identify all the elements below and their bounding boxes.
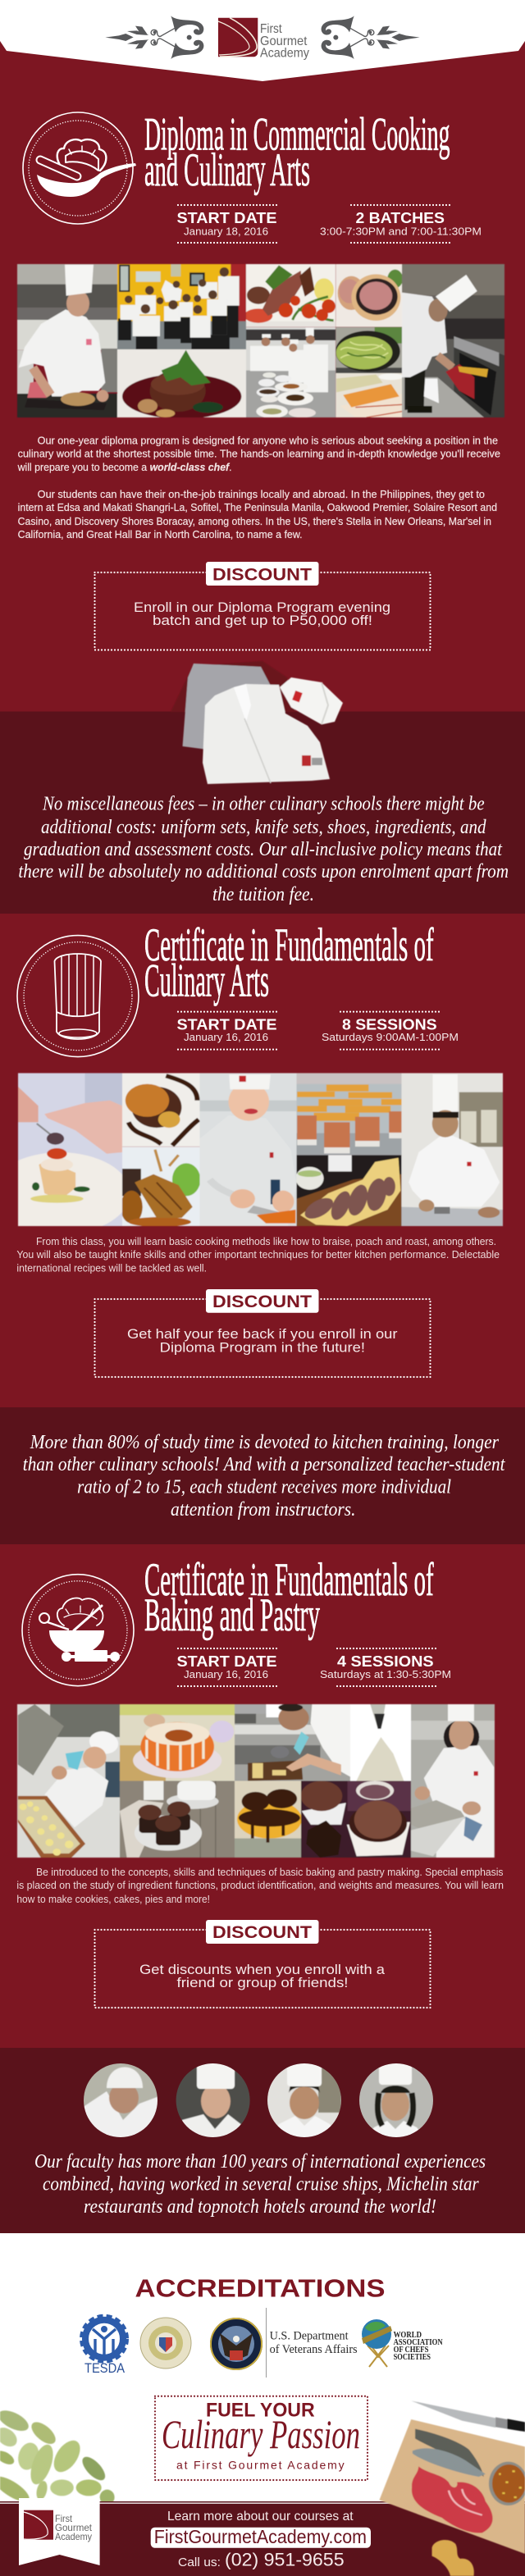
quote: faculty [34,2151,486,2218]
panel: diploma course [17,109,504,650]
callout: fuel your culinary passion: at First Gourmet Academy [176,2459,345,2472]
image: uniform set [171,661,343,784]
panel: certificate culinary arts [0,919,503,1377]
footer band [0,2501,525,2576]
heading: culinary arts: Culinary Arts [144,955,269,1007]
panel: kitchen training [0,1407,525,1544]
heading: culinary arts [144,919,434,1007]
quote: kitchen training: attention from instructors. [171,1499,356,1521]
text block: diploma description: Our one-year diploma program is designed for anyone who is serious about seeking a position in the [38,435,498,446]
photo: chef two [176,2063,250,2137]
sessions [320,1648,451,1686]
batches: 3:00-7:30PM and 7:00-11:30PM [320,226,482,238]
heading: accreditations: ACCREDITATIONS [135,2274,386,2303]
photo: chef one [84,2063,158,2137]
sessions: Saturdays 9:00AM-1:00PM [322,1031,459,1043]
logo: Gourmet [260,34,308,48]
callout: culinary discount: Diploma Program in the future! [160,1341,365,1356]
batches [320,205,482,243]
ornament left [105,16,203,59]
white header shape [0,0,525,81]
icon: pan and chef hat emblem [23,112,136,224]
photo collage: culinary arts [0,1073,503,1234]
panel: certificate baking [16,1554,504,2008]
icon: bowl and rolling pin emblem [22,1575,134,1686]
text block: diploma description: Casino, and Discovery Shores Boracay, among others. In the US, there's Stella in New Orleans, Mar'sel in [18,516,491,527]
photo: chef four [359,2063,433,2137]
sessions: 4 SESSIONS [337,1653,434,1670]
panel: accreditations and footer [0,2233,525,2576]
text block: diploma description [17,435,500,540]
callout: baking discount: Get discounts when you enroll with a [139,1963,386,1977]
quote: faculty: restaurants and topnotch hotels around the world! [84,2196,436,2218]
logo ribbon: First [55,2513,73,2524]
callout: fuel your culinary passion: Culinary Passion [162,2411,360,2457]
contact block: FirstGourmetAcademy.com [154,2526,367,2547]
sessions: 8 SESSIONS [342,1017,437,1033]
white background [0,2233,525,2504]
dark band [0,2048,525,2233]
quote: kitchen training: ratio of 2 to 15, each student receives more individual [77,1477,451,1498]
logo: world association of chefs societies [362,2319,443,2367]
image: cardamom pods [0,2406,115,2505]
quote: fees: the tuition fee. [212,884,314,905]
text block: culinary description: From this class, you will learn basic cooking methods like how to braise, poach and roast, among others. [36,1236,496,1247]
contact block: Learn more about our courses at [167,2510,354,2524]
logo [218,18,309,60]
logo: First [260,22,282,36]
callout: culinary discount: DISCOUNT [212,1293,312,1311]
sessions: Saturdays at 1:30-5:30PM [320,1668,451,1680]
text: department of veterans affairs: of Veterans Affairs [270,2343,358,2356]
start date: January 16, 2016 [184,1031,268,1043]
heading: baking: Baking and Pastry [144,1589,320,1641]
text block: culinary description [16,1236,500,1274]
dark band [0,712,525,914]
callout: baking discount [95,1920,430,2008]
logo: world association of chefs societies: ASSOCIATION [394,2338,443,2347]
callout: culinary discount [95,1289,430,1377]
photo: chef three [267,2063,341,2137]
batches: 2 BATCHES [356,210,445,226]
quote: fees [18,794,509,905]
text block: baking description: Be introduced to the concepts, skills and techniques of basic baking and pastry making. Special emphasis [36,1867,504,1878]
text: department of veterans affairs: U.S. Department [270,2330,349,2343]
callout: diploma discount: Enroll in our Diploma Program evening [134,600,390,615]
start date: START DATE [177,1017,277,1033]
heading: diploma [144,109,450,196]
text block: diploma description: will prepare you to become a world-class chef. [17,462,232,473]
image: cutting board, knife, fish, meat and pepper mill [379,2400,525,2576]
callout: baking discount: DISCOUNT [212,1923,312,1942]
text block: diploma description: California, and Great Hall Bar in North Carolina, to name a few. [18,529,303,540]
callout: fuel your culinary passion [155,2396,368,2480]
logo: TESDA [81,2316,127,2376]
ornament right [322,16,420,59]
logo: Academy [260,46,309,60]
start date [177,1012,277,1050]
heading: diploma: and Culinary Arts [144,144,310,196]
callout: fuel your culinary passion: FUEL YOUR [206,2400,315,2422]
icon: toque emblem [17,936,139,1057]
start date [177,205,277,243]
sessions [322,1012,459,1050]
photo collage: diploma [17,264,504,419]
start date: January 16, 2016 [184,1668,268,1680]
start date [177,1648,277,1686]
divider [266,2308,267,2378]
text block: baking description [16,1867,504,1905]
heading: baking [144,1554,434,1641]
start date: START DATE [177,1653,277,1670]
start date: January 18, 2016 [184,226,268,238]
logo ribbon: Gourmet [55,2522,93,2533]
logo: world association of chefs societies: WORLD [394,2331,422,2340]
callout: diploma discount: batch and get up to P50,000 off! [153,613,372,628]
callout: diploma discount [95,562,430,650]
logo ribbon [19,2498,100,2565]
logo: world association of chefs societies: SOCIETIES [394,2353,431,2362]
text block: baking description: how to make cookies, cakes, pies and more! [16,1894,210,1905]
start date: START DATE [177,210,277,226]
logo ribbon: Academy [55,2531,92,2542]
callout: culinary discount: Get half your fee back if you enroll in our [127,1327,398,1342]
text block: diploma description: culinary world at the shortest possible time. The hands-on learning and in-depth knowledge you'll receive [18,448,500,459]
text block: diploma description: Our students can have their on-the-job trainings locally and abroad. In the Philippines, they get to [38,489,485,500]
callout: baking discount: friend or group of friends! [177,1976,348,1990]
panel: faculty [0,2048,525,2233]
quote: kitchen training [23,1432,506,1521]
photo collage: baking [17,1703,495,1858]
text: department of veterans affairs [270,2330,358,2356]
contact block: (02) 951-9655 [225,2550,345,2570]
text block: culinary description: international recipes will be tackled as well. [16,1263,207,1274]
text block: baking description: is placed on the study of ingredient functions, product identification, and weights and measures. You will learn [16,1880,504,1891]
header banner [0,0,525,81]
logo: world association of chefs societies: OF CHEFS [394,2346,429,2355]
dark band [0,1407,525,1544]
contact block: Call us: [178,2555,221,2569]
text block: diploma description: intern at Edsa and Makati Shangri-La, Sofitel, The Peninsula Manila, Oakwood Premier, Solaire Resort and [18,502,497,513]
logo: bureau of immigration [140,2318,191,2369]
text block: culinary description: You will also be taught knife skills and other important techniques for better kitchen performance. Delectable [16,1249,500,1261]
logo: veterans affairs [210,2318,262,2370]
panel: no miscellaneous fees [0,661,525,914]
contact block [151,2510,371,2570]
callout: diploma discount: DISCOUNT [212,566,312,584]
logo: TESDA: TESDA [84,2360,126,2376]
